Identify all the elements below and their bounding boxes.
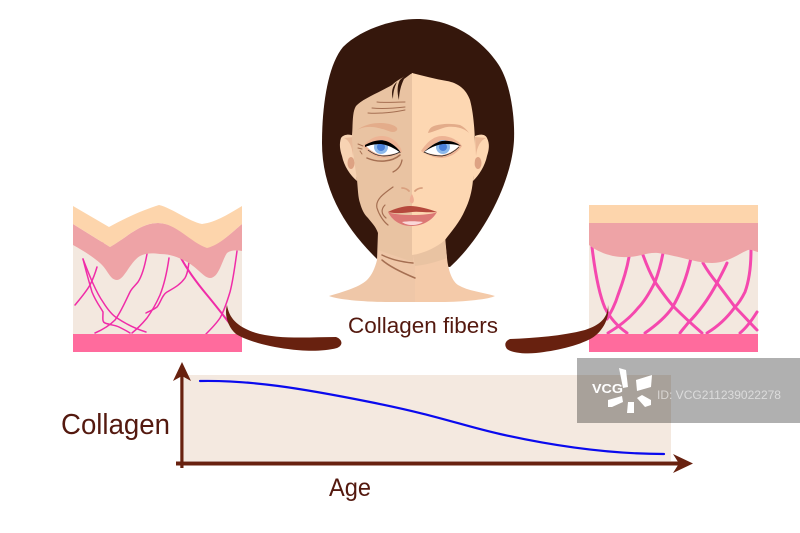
layer: aged base band: [73, 334, 242, 352]
y axis label: Collagen: [61, 409, 170, 441]
watermark logo: [592, 368, 652, 413]
layer: aged epidermis: [73, 205, 242, 248]
pointer: right fiber connector: [505, 305, 608, 353]
young half of face: [412, 73, 475, 255]
aged half of face: [352, 73, 413, 262]
layer: young base band: [589, 334, 758, 352]
hair strands: [392, 73, 412, 100]
y axis arrow: [173, 362, 191, 468]
x axis arrow: [176, 454, 693, 473]
fibers: dense young collagen: [592, 247, 757, 333]
watermark: [577, 358, 800, 423]
fibers: aged sparse collagen: [75, 240, 237, 334]
x axis label: Age: [329, 474, 371, 502]
illustration: woman's face half aged half young: [322, 19, 514, 302]
right eye: [421, 136, 462, 158]
wrinkles: [358, 102, 415, 278]
layer: aged dermis: [73, 223, 242, 280]
layer: young epidermis: [589, 205, 758, 223]
panel: aged skin cross-section: [73, 205, 242, 352]
chart background: [183, 375, 671, 461]
left ear: [340, 135, 357, 181]
chart: collagen decline with age: [61, 362, 693, 502]
eyebrows: [357, 123, 397, 132]
label: Collagen fibers: Collagen fibers: [348, 313, 498, 338]
neck and shoulders: [329, 232, 415, 302]
nose: [402, 188, 422, 191]
watermark logo: VCG: [592, 381, 623, 396]
layer: young dermis: [589, 223, 758, 263]
hair: [322, 19, 514, 267]
pointer: left fiber connector: [226, 305, 341, 351]
jaw shadow: [413, 240, 447, 266]
left eye: [363, 136, 402, 158]
panel: young skin cross-section: [589, 205, 758, 352]
line: collagen curve: [200, 381, 664, 454]
lips: [388, 206, 437, 226]
right ear: [473, 135, 489, 181]
watermark id: ID: VCG211239022278: [657, 390, 781, 402]
